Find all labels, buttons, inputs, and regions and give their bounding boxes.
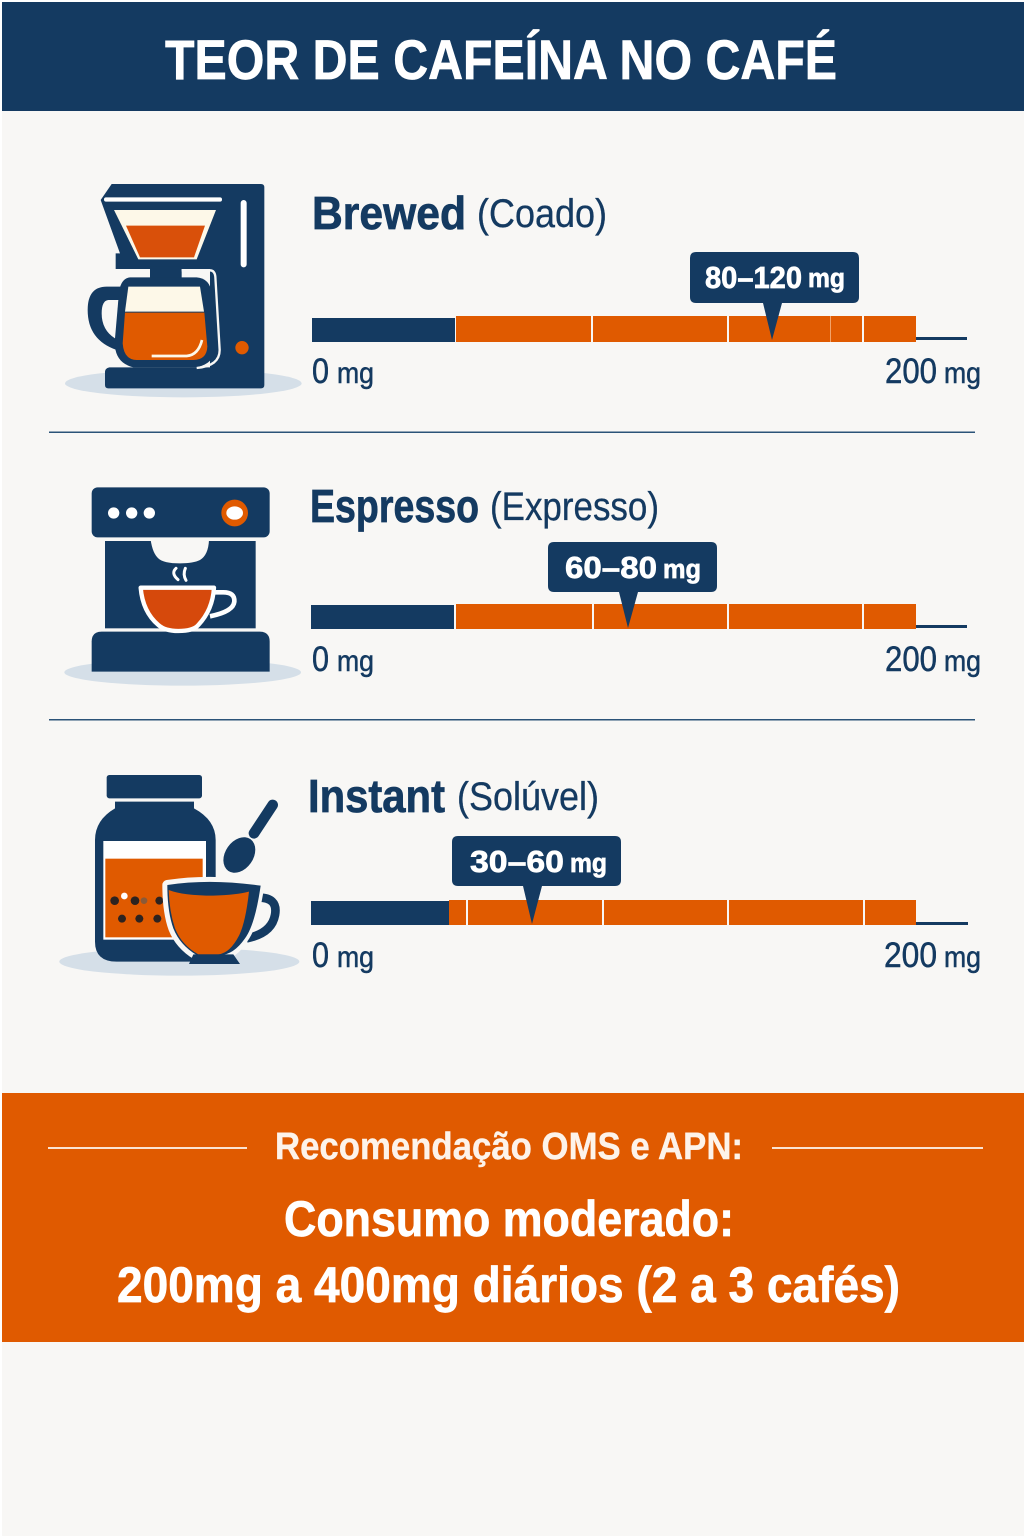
recommendation banner <box>2 1093 1024 1342</box>
recommendation line 2: 200mg a 400mg diários (2 a 3 cafés) <box>117 1257 900 1313</box>
bar: espresso <box>311 604 967 629</box>
axis labels: espresso: 0 <box>312 640 329 679</box>
axis labels: instant: 200 <box>884 936 937 975</box>
title: TEOR DE CAFEÍNA NO CAFÉ <box>165 28 837 91</box>
axis labels: espresso: mg <box>337 645 374 678</box>
panel: instant <box>59 770 981 976</box>
axis labels: brewed: 0 <box>312 352 329 391</box>
icon: coffee maker <box>65 184 302 397</box>
header banner <box>2 2 1024 111</box>
panel: espresso <box>64 480 981 686</box>
callout: 60-80 mg: mg <box>663 554 701 584</box>
axis labels: brewed: 200 <box>885 352 937 391</box>
bar: brewed <box>312 316 967 342</box>
heading: espresso: Espresso <box>310 480 479 532</box>
axis labels: brewed <box>312 352 981 391</box>
axis labels: espresso: 200 <box>885 640 937 679</box>
icon: instant coffee jar and cup <box>59 775 299 976</box>
heading: espresso <box>310 480 659 532</box>
recommendation heading: Recomendação OMS e APN: <box>275 1126 743 1168</box>
heading: brewed: Brewed <box>312 187 466 239</box>
axis labels: brewed: mg <box>944 357 981 390</box>
callout: 80-120 mg: 80–120 <box>705 260 802 295</box>
axis labels: instant: 0 <box>312 936 329 975</box>
heading: instant: (Solúvel) <box>457 775 599 819</box>
axis labels: espresso <box>312 640 981 679</box>
icon: espresso machine <box>64 487 301 686</box>
callout: 30-60 mg: mg <box>570 848 607 878</box>
bar: instant <box>311 900 968 925</box>
callout: 30-60 mg <box>452 836 621 924</box>
callout: 80-120 mg: mg <box>808 263 845 293</box>
axis labels: instant: mg <box>337 941 374 974</box>
heading: instant <box>308 770 599 822</box>
axis labels: brewed: mg <box>337 357 374 390</box>
heading: brewed <box>312 187 607 239</box>
callout: 60-80 mg: 60–80 <box>565 550 657 585</box>
recommendation line 1: Consumo moderado: <box>284 1191 734 1247</box>
axis labels: instant: mg <box>944 941 981 974</box>
heading: brewed: (Coado) <box>477 192 607 236</box>
axis labels: instant <box>312 936 981 975</box>
panel: brewed <box>65 184 981 397</box>
callout: 60-80 mg <box>548 542 717 628</box>
callout: 80-120 mg <box>690 252 859 340</box>
axis labels: espresso: mg <box>944 645 981 678</box>
heading: espresso: (Expresso) <box>490 485 659 529</box>
callout: 30-60 mg: 30–60 <box>470 844 564 879</box>
heading: instant: Instant <box>308 770 445 822</box>
